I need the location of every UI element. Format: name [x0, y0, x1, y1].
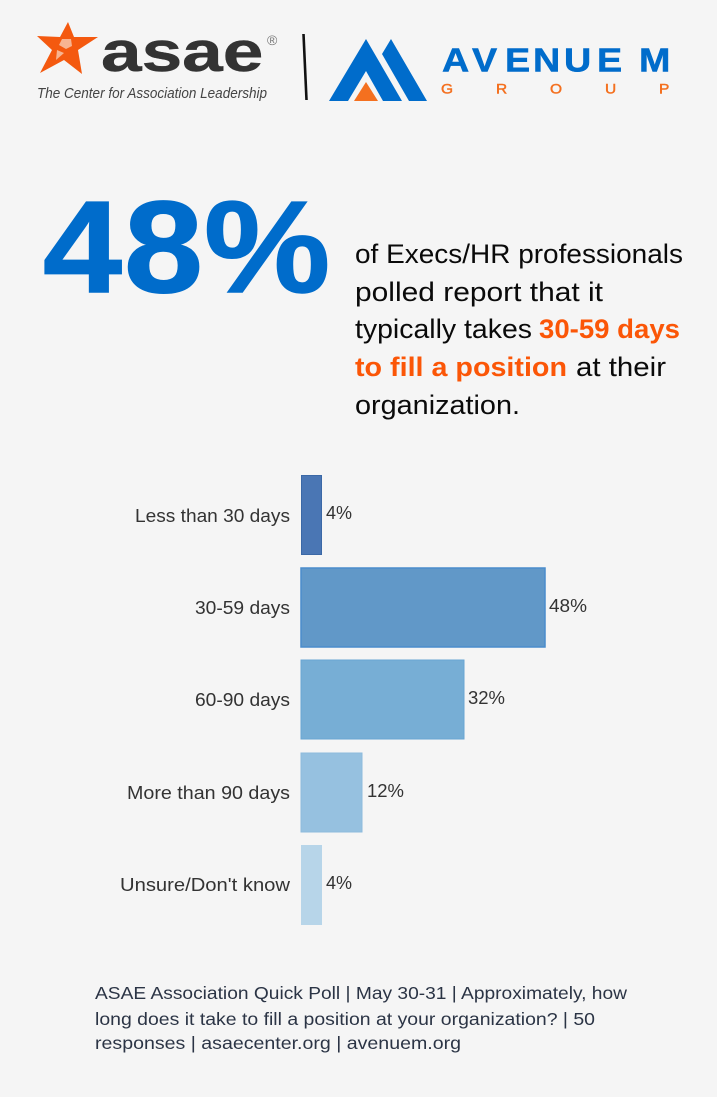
Avenue M wordmark: AVENUE M [442, 42, 670, 79]
bar: more than 90 days: More than 90 days [127, 783, 290, 803]
footer source note [95, 983, 627, 1053]
bar: less than 30 days: 4% [326, 503, 352, 523]
bar: 60-90 days [195, 660, 505, 739]
statistic description [355, 239, 683, 420]
bar: less than 30 days [135, 476, 352, 554]
bar chart [120, 476, 587, 925]
footer source note: responses | asaecenter.org | avenuem.org [95, 1033, 461, 1053]
logo divider [304, 34, 306, 100]
bar: unsure or don't know [120, 845, 352, 925]
ASAE wordmark: asae [101, 20, 263, 83]
statistic description: at their [576, 352, 666, 382]
bar: more than 90 days [127, 753, 404, 832]
registered mark: ® [267, 32, 278, 48]
bar: less than 30 days: Less than 30 days [135, 506, 290, 526]
bar: 60-90 days: 32% [468, 688, 505, 708]
ASAE tagline: The Center for Association Leadership [37, 86, 267, 102]
footer source note: ASAE Association Quick Poll | May 30-31 | Approximately, how [95, 983, 627, 1003]
bar: unsure or don't know: Unsure/Don't know [120, 875, 291, 895]
bar: more than 90 days: 12% [367, 781, 404, 801]
icon: ASAE orange star [37, 22, 98, 74]
statistic description: typically takes [355, 314, 532, 344]
statistic description: organization. [355, 390, 520, 420]
bar: unsure or don't know: 4% [326, 873, 352, 893]
footer source note: long does it take to fill a position at your organization? | 50 [95, 1009, 595, 1029]
bar: 60-90 days: 60-90 days [195, 690, 290, 710]
statistic description: to fill a position [355, 352, 567, 382]
Group wordmark: GROUP [441, 82, 670, 97]
big statistic: 48% [43, 173, 330, 320]
statistic description: 30-59 days [539, 314, 680, 344]
logo: Avenue M Group [329, 39, 670, 101]
bar: 30-59 days [195, 568, 587, 647]
bar: 30-59 days: 48% [549, 596, 587, 616]
icon: Avenue M mountains [329, 39, 427, 101]
logo: ASAE [37, 20, 278, 102]
statistic description: polled report that it [355, 277, 604, 307]
bar: 30-59 days: 30-59 days [195, 598, 290, 618]
statistic description: of Execs/HR professionals [355, 239, 683, 269]
